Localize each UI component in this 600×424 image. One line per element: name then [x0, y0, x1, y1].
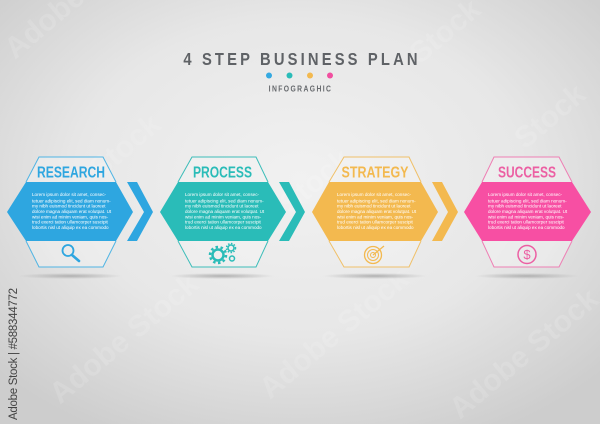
body text: dolore magna aliquam erat volutpat. Ut — [32, 209, 112, 214]
icon: target — [364, 246, 384, 264]
title: 4 STEP BUSINESS PLAN — [183, 50, 421, 69]
body text: lobortis nisl ut aliquip ex ea commodo — [32, 225, 109, 230]
body text: lobortis nisl ut aliquip ex ea commodo — [185, 225, 262, 230]
body text: my nibh euismod tincidunt ut laoreet — [488, 204, 562, 209]
panel: strategy — [312, 157, 458, 279]
body text: tetuer adipiscing elit, sed diam nonum- — [337, 198, 416, 203]
watermarks: Stock — [83, 107, 167, 185]
body text: trud exerci tation ullamcorper suscipit — [32, 220, 109, 225]
body text: my nibh euismod tincidunt ut laoreet — [32, 204, 106, 209]
heading: PROCESS — [193, 164, 252, 182]
body text: tetuer adipiscing elit, sed diam nonum- — [488, 198, 567, 203]
hexagon outline — [329, 157, 421, 267]
heading: RESEARCH — [37, 164, 105, 182]
body text: Lorem ipsum dolor sit amet, consec- — [32, 192, 107, 197]
body text: lobortis nisl ut aliquip ex ea commodo — [488, 225, 565, 230]
panel: process — [160, 157, 305, 279]
colour dots — [266, 72, 333, 78]
body text: trud exerci tation ullamcorper suscipit — [488, 220, 565, 225]
body text: wisi enim ad minim veniam, quis nos- — [337, 214, 414, 219]
icon: gears — [210, 244, 236, 263]
icon: magnifier — [62, 245, 79, 261]
shadow — [323, 273, 427, 279]
panel: research — [7, 157, 153, 279]
body text: Lorem ipsum dolor sit amet, consec- — [488, 192, 563, 197]
watermarks: Adobe Stock — [43, 267, 205, 410]
body text: tetuer adipiscing elit, sed diam nonum- — [32, 198, 111, 203]
body text: wisi enim ad minim veniam, quis nos- — [185, 214, 262, 219]
arrow — [127, 182, 153, 241]
body text — [185, 192, 265, 230]
panel: success — [464, 157, 591, 279]
icon: dollar coin: $ — [523, 247, 531, 262]
hexagon outline — [26, 157, 116, 267]
body text: Lorem ipsum dolor sit amet, consec- — [185, 192, 260, 197]
body text: Lorem ipsum dolor sit amet, consec- — [337, 192, 412, 197]
body text — [337, 192, 417, 230]
watermarks: Stock — [508, 77, 592, 155]
adobe stock credit: Adobe Stock | #588344772 — [8, 288, 20, 420]
body text: my nibh euismod tincidunt ut laoreet — [185, 204, 259, 209]
body text — [32, 192, 112, 230]
heading: SUCCESS — [498, 164, 556, 182]
shadow — [170, 273, 274, 279]
body text: trud exerci tation ullamcorper suscipit — [185, 220, 262, 225]
body text: wisi enim ad minim veniam, quis nos- — [488, 214, 565, 219]
hexagon outline — [482, 157, 572, 267]
body text: wisi enim ad minim veniam, quis nos- — [32, 214, 109, 219]
heading: STRATEGY — [342, 164, 409, 182]
hexagon outline — [178, 157, 268, 267]
body text: lobortis nisl ut aliquip ex ea commodo — [337, 225, 414, 230]
subtitle: INFOGRAGHIC — [269, 84, 332, 94]
arrow — [279, 182, 305, 241]
body text: trud exerci tation ullamcorper suscipit — [337, 220, 414, 225]
body text: dolore magna aliquam erat volutpat. Ut — [185, 209, 265, 214]
body text: my nibh euismod tincidunt ut laoreet — [337, 204, 411, 209]
body text: dolore magna aliquam erat volutpat. Ut — [337, 209, 417, 214]
body text — [488, 192, 568, 230]
shadow — [18, 273, 122, 279]
watermarks: Stock — [273, 142, 357, 220]
watermarks: Adobe Stock — [253, 262, 415, 405]
body text: dolore magna aliquam erat volutpat. Ut — [488, 209, 568, 214]
filled band — [464, 182, 591, 241]
filled band — [312, 182, 438, 241]
body text: tetuer adipiscing elit, sed diam nonum- — [185, 198, 264, 203]
filled band — [160, 182, 286, 241]
shadow — [475, 273, 579, 279]
arrow — [432, 182, 458, 241]
filled band — [7, 182, 133, 241]
